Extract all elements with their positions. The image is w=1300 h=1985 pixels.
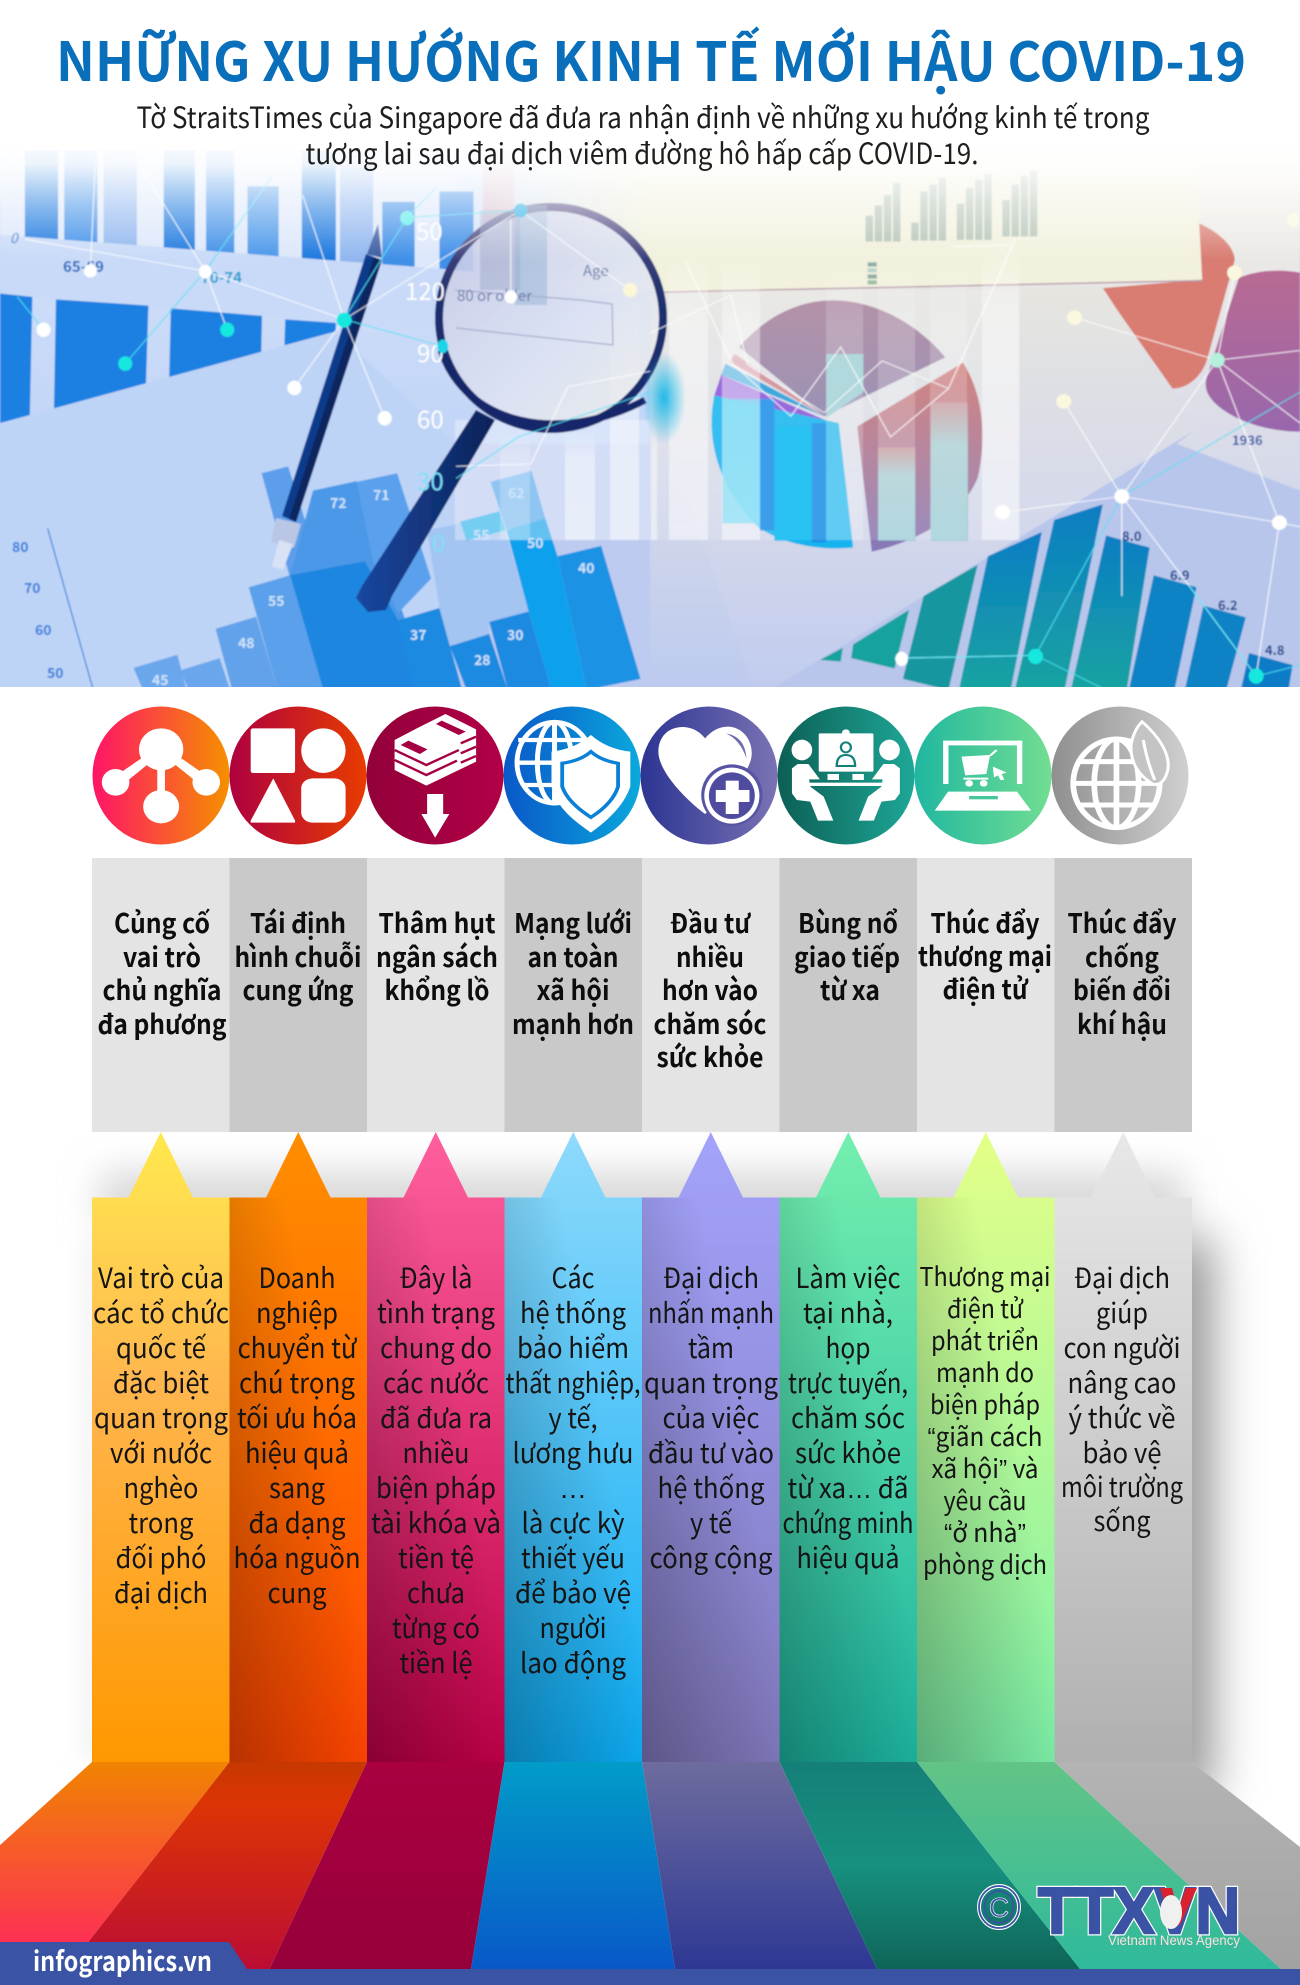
column 4: light blue: … <box>559 1473 587 1504</box>
chart labels in photo: 45 <box>152 670 169 690</box>
column 7: lime-mint: “ở nhà” <box>944 1513 1026 1550</box>
column 7: lime-mint: phát triển <box>931 1321 1039 1358</box>
chart labels in photo: 62 <box>508 483 525 503</box>
column 5: violet: công cộng <box>650 1537 773 1577</box>
chart labels in photo: 60 <box>417 400 444 435</box>
column 6: green-teal: họp <box>826 1327 870 1367</box>
icon 4: globe with shield <box>504 706 640 844</box>
column 6: green-teal: từ xa… đã <box>788 1467 908 1507</box>
chart labels in photo: 6.9 <box>1170 565 1190 584</box>
headline 4: xã hội <box>536 969 610 1008</box>
column 7: lime-mint: “giãn cách <box>928 1417 1042 1454</box>
column 2: orange-red: cung <box>268 1572 327 1612</box>
chart labels in photo: 80 <box>12 537 29 557</box>
column 3: pink-crimson: biện pháp <box>376 1467 496 1507</box>
headline 2: cung ứng <box>242 969 354 1008</box>
headline 8: chống <box>1085 936 1159 975</box>
column 6: green-teal: tại nhà, <box>803 1292 893 1332</box>
headline 8: khí hậu <box>1077 1003 1167 1042</box>
translucent vertical bars overlay <box>454 282 1020 542</box>
column 1: yellow-orange <box>92 1132 230 1762</box>
column 8: grey: giúp <box>1096 1292 1148 1332</box>
column 5: violet: đầu tư vào <box>648 1432 774 1472</box>
TTXVN logo: Vietnam News Agency <box>1108 1932 1240 1948</box>
icon 1: network nodes <box>92 706 230 844</box>
pie chart <box>739 300 945 416</box>
chart labels in photo: Age <box>583 260 609 281</box>
cream paper extension behind magnifier <box>570 183 650 258</box>
headline 1: vai trò <box>123 936 201 975</box>
column 1: yellow-orange: quan trọng <box>94 1397 228 1437</box>
headline 1: chủ nghĩa <box>102 969 222 1008</box>
column 3: pink-crimson: chung do <box>380 1327 492 1367</box>
column 8: grey: môi trường <box>1061 1466 1183 1506</box>
column 6: green-teal: sức khỏe <box>795 1432 901 1472</box>
title: NHỮNG XU HƯỚNG KINH TẾ MỚI HẬU COVID-19 <box>56 18 1246 97</box>
chart labels in photo: 65-69 <box>63 256 104 277</box>
chart labels in photo: 70 <box>24 578 41 598</box>
left half of photo: bar charts on paper <box>0 150 650 690</box>
column 3: pink-crimson: tiền tệ <box>398 1537 474 1577</box>
chart labels in photo: 48 <box>238 633 255 653</box>
column 4: light blue: lao động <box>520 1642 626 1682</box>
chart labels in photo: 8.0 <box>1122 526 1142 545</box>
chart labels in photo: 28 <box>474 650 491 670</box>
column 2: orange-red: sang <box>269 1467 325 1507</box>
column 1: yellow-orange: đại dịch <box>114 1572 208 1612</box>
headline 1: đa phương <box>98 1003 226 1042</box>
TTXVN logo: TTXVN <box>1038 1874 1240 1947</box>
column 5: violet: hệ thống <box>658 1467 765 1507</box>
headline 4: Mạng lưới <box>514 902 632 941</box>
intro text: tương lai sau đại dịch viêm đường hô hấp cấp COVID-19. <box>306 131 978 173</box>
column 4: light blue: thất nghiệp, <box>506 1362 640 1402</box>
headline 4: mạnh hơn <box>512 1003 634 1042</box>
column 4: light blue: bảo hiểm <box>517 1327 629 1367</box>
headline 6: từ xa <box>820 969 880 1008</box>
chart labels in photo: 80 or older <box>457 285 532 306</box>
column 1: yellow-orange: nghèo <box>124 1467 198 1507</box>
column 3: pink-crimson: nhiều <box>402 1432 470 1472</box>
headline 3: khổng lồ <box>384 969 490 1008</box>
chart labels in photo: 72 <box>330 493 347 513</box>
cyan lens flare <box>642 352 686 444</box>
headline 8 <box>1068 902 1177 1042</box>
floor bands <box>0 1762 1300 1969</box>
chart labels in photo: 90 <box>417 334 444 369</box>
chart labels in photo: 6.2 <box>1218 595 1238 614</box>
headline 8: biến đổi <box>1073 969 1171 1008</box>
headline 5 <box>654 902 766 1075</box>
column 2: orange-red: chú trọng <box>239 1362 355 1402</box>
chart labels in photo: 30 <box>507 625 524 645</box>
chart labels in photo: 4.8 <box>1265 640 1285 659</box>
column 5: violet: y tế <box>690 1502 732 1542</box>
column 1: yellow-orange: quốc tế <box>116 1327 206 1367</box>
headline 2 <box>234 902 362 1008</box>
headline 3 <box>376 902 498 1008</box>
column 1: yellow-orange: với nước <box>110 1432 212 1472</box>
TTXVN logo: TTXVN <box>1038 1874 1240 1947</box>
icon: magnifying glass <box>356 205 663 612</box>
column 6: green-teal <box>780 1132 917 1762</box>
column 6: green-teal: chăm sóc <box>791 1397 905 1437</box>
chart labels in photo: 55 <box>473 525 490 545</box>
column 6: green-teal: Làm việc <box>796 1257 900 1297</box>
headline 3: ngân sách <box>376 936 498 975</box>
network lines and dots overlay <box>17 160 650 478</box>
column 6: green-teal: chứng minh <box>782 1502 914 1542</box>
chart labels in photo: 50 <box>527 533 544 553</box>
icon 7: laptop with shopping cart <box>914 706 1052 844</box>
footer bar and site tab: infographics.vn <box>33 1940 212 1979</box>
column 3: pink-crimson: chưa <box>407 1572 465 1612</box>
column 1: yellow-orange: Vai trò của <box>98 1257 224 1297</box>
column 8: grey: con người <box>1064 1327 1180 1367</box>
column 2: orange-red: chuyển từ <box>238 1327 357 1367</box>
icon 5: heart with plus <box>640 706 778 844</box>
chart labels in photo <box>10 212 1285 690</box>
column 1: yellow-orange: trong <box>128 1502 194 1542</box>
column 4: light blue: là cực kỳ <box>522 1502 625 1542</box>
headline 6: Bùng nổ <box>798 902 898 941</box>
chart labels in photo: 70-74 <box>201 267 242 288</box>
column 7: lime-mint: Thương mại <box>920 1257 1050 1294</box>
column 2: orange-red: tối ưu hóa <box>237 1397 357 1437</box>
column 4: light blue: thiết yếu <box>521 1537 625 1577</box>
column 8: grey: bảo vệ <box>1082 1432 1162 1472</box>
icon: pen <box>271 224 382 570</box>
chart labels in photo: 55 <box>268 591 285 611</box>
headline 4 <box>512 902 634 1042</box>
chart labels in photo: 30 <box>417 462 444 497</box>
icon 8: globe with leaf <box>1052 706 1188 844</box>
column 4: light blue: lương hưu <box>512 1432 634 1472</box>
headline 1 <box>98 902 226 1042</box>
column 2: orange-red: nghiệp <box>256 1292 338 1332</box>
column 1: yellow-orange: đối phó <box>116 1537 206 1577</box>
column 7: lime-mint: biện pháp <box>930 1385 1040 1422</box>
headline 2: Tái định <box>250 902 346 941</box>
intro text: Tờ StraitsTimes của Singapore đã đưa ra nhận định về những xu hướng kinh tế trong <box>136 95 1150 137</box>
column 4: light blue: người <box>540 1607 606 1647</box>
icon 2: shapes <box>230 706 366 844</box>
column 1: yellow-orange: đặc biệt <box>113 1362 209 1402</box>
column 8: grey: ý thức về <box>1068 1397 1176 1437</box>
column 2: orange-red: đa dạng <box>248 1502 346 1542</box>
chart labels in photo: 71 <box>373 485 390 505</box>
column 4: light blue <box>504 1132 642 1762</box>
headline 5: sức khỏe <box>656 1036 764 1075</box>
white fade at top of photo <box>0 150 1300 259</box>
headline 8: Thúc đẩy <box>1068 902 1177 941</box>
chart labels in photo: 37 <box>410 625 427 645</box>
chart labels in photo: 0 <box>10 228 20 248</box>
small chart on cream paper <box>866 171 1037 242</box>
column 4: light blue: y tế, <box>548 1397 598 1437</box>
headline 7 <box>918 902 1052 1007</box>
chart labels in photo: 50 <box>47 663 64 683</box>
column 1: yellow-orange: các tổ chức <box>93 1292 229 1332</box>
column 3: pink-crimson: Đây là <box>400 1257 472 1297</box>
icon 6: remote meeting <box>778 706 914 844</box>
chart labels in photo: 1936 <box>1232 430 1263 449</box>
intro text <box>136 95 1150 173</box>
chart labels in photo: 60 <box>35 620 52 640</box>
teal bar chart <box>851 610 909 669</box>
column 2: orange-red: hóa nguồn <box>234 1537 360 1577</box>
column 7: lime-mint <box>917 1132 1054 1762</box>
column 8: grey <box>1054 1132 1192 1762</box>
headline 5: hơn vào <box>662 969 758 1008</box>
headline 6: giao tiếp <box>794 936 900 975</box>
column 5: violet: nhấn mạnh <box>648 1292 774 1332</box>
headline 7: Thúc đẩy <box>930 902 1040 941</box>
column 3: pink-crimson: tình trạng <box>377 1292 495 1332</box>
column 7: lime-mint: xã hội” và <box>932 1449 1038 1486</box>
column 2: orange-red: Doanh <box>258 1257 336 1297</box>
column 3: pink-crimson: tài khóa và <box>371 1502 501 1542</box>
headline 6 <box>794 902 900 1008</box>
column 7: lime-mint: yêu cầu <box>944 1481 1026 1518</box>
headline 5: Đầu tư <box>670 902 752 941</box>
column 3: pink-crimson: đã đưa ra <box>380 1397 492 1437</box>
right half of photo: papers, pie chart, teal bars <box>650 150 1300 690</box>
wall shadow behind columns <box>85 1172 1212 1798</box>
column 8: grey: Đại dịch <box>1074 1257 1170 1297</box>
column 7: lime-mint: điện tử <box>947 1289 1024 1326</box>
column 4: light blue: Các <box>552 1257 594 1297</box>
headline 7: điện tử <box>942 968 1029 1007</box>
chart labels in photo: 40 <box>578 558 595 578</box>
chart labels in photo: 120 <box>405 272 445 307</box>
column 6: green-teal: hiệu quả <box>796 1537 900 1577</box>
headline 2: hình chuỗi <box>234 936 362 975</box>
column 4: light blue: hệ thống <box>520 1292 626 1332</box>
column 7: lime-mint: phòng dịch <box>923 1545 1047 1582</box>
TTXVN logo: C <box>989 1892 1009 1923</box>
column 3: pink-crimson: các nước <box>383 1362 489 1402</box>
headline 4: an toàn <box>528 936 618 975</box>
column 5: violet: Đại dịch <box>663 1257 759 1297</box>
headline 7: thương mại <box>918 935 1052 974</box>
column 5: violet: tầm <box>688 1327 734 1367</box>
column 3: pink-crimson <box>367 1132 504 1762</box>
footer bar and site tab <box>0 1940 1300 1985</box>
column 7: lime-mint: mạnh do <box>936 1353 1034 1390</box>
column 8: grey: nâng cao <box>1068 1362 1176 1402</box>
headline 5: chăm sóc <box>654 1003 766 1042</box>
chart labels in photo: 0 <box>432 524 445 559</box>
column 2: orange-red: hiệu quả <box>245 1432 349 1472</box>
column 3: pink-crimson: tiền lệ <box>400 1642 472 1682</box>
icon 3: money stack and down arrow <box>366 706 504 844</box>
column 8: grey: sống <box>1094 1500 1151 1540</box>
column 6: green-teal: trực tuyến, <box>788 1362 908 1402</box>
column 5: violet: của việc <box>662 1397 760 1437</box>
chart labels in photo: 50 <box>416 212 443 247</box>
column 3: pink-crimson: từng có <box>392 1607 480 1647</box>
headline panels <box>92 858 1192 1132</box>
column 2: orange-red <box>230 1132 367 1762</box>
column 4: light blue: để bảo vệ <box>515 1572 631 1612</box>
headline 1: Củng cố <box>114 902 210 941</box>
headline 3: Thâm hụt <box>378 902 496 941</box>
column 5: violet: quan trọng <box>644 1362 778 1402</box>
headline 5: nhiều <box>676 936 744 975</box>
hero photo: charts, magnifier and pen <box>0 136 1300 700</box>
column 5: violet <box>642 1132 780 1762</box>
